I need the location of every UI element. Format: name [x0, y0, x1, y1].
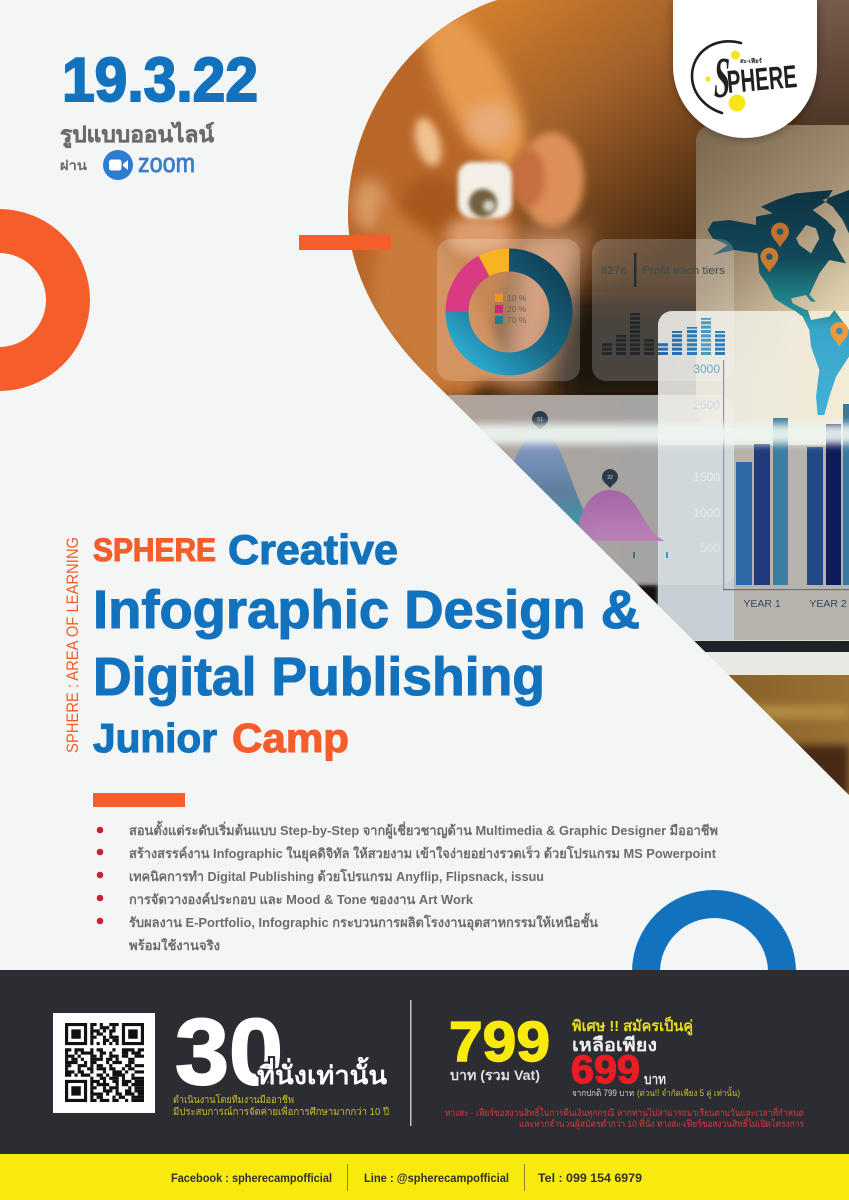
bullet list: [97, 820, 718, 953]
bullet list: รับผลงาน E-Portfolio, Infographic กระบวนการผลิตโรงงานอุตสาหกรรมให้เหนือชั้น: [129, 912, 598, 931]
title block: Digital Publishing: [93, 647, 545, 707]
couple offer: พิเศษ !! สมัครเป็นคู่: [572, 1016, 693, 1036]
online format label: รูปแบบออนไลน์: [60, 121, 214, 149]
seats only label: ที่นั่งเท่านั้น: [257, 1056, 387, 1090]
title block: Infographic Design &: [93, 580, 640, 640]
icon: yellow dots: [705, 50, 745, 111]
icon: world map with location pins: [708, 190, 849, 415]
mini bar chart: [607, 313, 720, 355]
bar chart: YEAR 1: [743, 598, 781, 610]
regular price note: [572, 1086, 740, 1099]
orange accent bar: [299, 235, 391, 250]
couple offer: 699: [571, 1048, 640, 1092]
bar chart: YEAR 2: [809, 598, 847, 610]
screen area below the dashboard: [430, 395, 849, 800]
pill held between the fingers: [458, 162, 512, 218]
icon: sphere arc: [692, 41, 741, 113]
organiser note: [173, 1093, 389, 1118]
chart axis labels: 3000: [693, 362, 720, 376]
regular price note: (ด่วน!! จำกัดเพียง 5 คู่ เท่านั้น): [637, 1086, 740, 1099]
panel: area chart card: [420, 395, 734, 585]
title block: SPHERE: [93, 532, 216, 568]
seat count number: 30: [175, 999, 283, 1104]
card heading: 8276: [601, 265, 627, 277]
panel: donut card: [437, 239, 580, 381]
chart axis labels: 2000: [693, 434, 720, 448]
logo wordmark: S: [714, 45, 730, 110]
glare band across the screen: [470, 424, 849, 444]
QR code: [53, 1013, 155, 1113]
photo: hand touching a dashboard of charts: [340, 0, 849, 800]
chart axis labels: 1000: [693, 506, 720, 520]
couple offer: [571, 1016, 693, 1092]
refund conditions: ทางสะ - เฟียร์ขอสงวนสิทธิ์ในการคืนเงินทุกกรณี หากท่านไม่สามารถมาเรียนตามวันและเวลาที่กำหนด: [445, 1105, 804, 1119]
orange divider bar: [93, 793, 185, 807]
card heading: [601, 253, 726, 287]
organiser note: มีประสบการณ์การจัดค่ายเพื่อการศึกษามากกว่า 10 ปี: [173, 1104, 389, 1118]
logo wordmark: PHERE: [725, 58, 798, 100]
donut legend: 20 %: [507, 304, 527, 314]
organiser note: ดำเนินงานโดยทีมงานมืออาชีพ: [173, 1093, 294, 1106]
contact details: Tel : 099 154 6979: [538, 1171, 642, 1185]
title block: Junior: [93, 715, 217, 761]
vertical separator: [410, 1000, 412, 1126]
chart axis labels: 500: [700, 541, 720, 555]
icon: zoom camera: [103, 150, 133, 180]
panel: dark info band: [0, 970, 849, 1154]
couple offer: บาท: [644, 1071, 666, 1087]
chart axis labels: 2500: [693, 398, 720, 412]
bullet list: เทคนิคการทำ Digital Publishing ด้วยโปรแกรม Anyflip, Flipsnack, issuu: [129, 868, 544, 884]
title block: Creative: [228, 526, 398, 573]
area chart: 22: [607, 475, 613, 481]
zoom wordmark: zoom: [138, 148, 195, 178]
via label: ผ่าน: [60, 158, 87, 173]
donut legend: 10 %: [507, 293, 527, 303]
bullet list: การจัดวางองค์ประกอบ และ Mood & Tone ของงาน Art Work: [129, 892, 474, 907]
logo wordmark: [714, 45, 798, 110]
world map panel: [696, 125, 849, 425]
chart axis labels: 1500: [693, 470, 720, 484]
vertical tagline: SPHERE : AREA OF LEARNING: [64, 537, 82, 753]
logo small thai wordmark: สะ-เฟียร์: [740, 57, 763, 65]
donut chart: [457, 260, 561, 364]
card heading: Profit each tiers: [642, 265, 726, 277]
bullet list: สร้างสรรค์งาน Infographic ในยุคดิจิทัล ให้สวยงาม เข้าใจง่ายอย่างรวดเร็ว ด้วยโปรแกรม MS Powerpoint: [129, 844, 717, 862]
refund conditions: [445, 1105, 804, 1130]
donut legend: 70 %: [507, 315, 527, 325]
bullet list: สอนตั้งแต่ระดับเริ่มต้นแบบ Step-by-Step จากผู้เชี่ยวชาญด้าน Multimedia & Graphic Designer มืออาชีพ: [129, 820, 718, 839]
date: 19.3.22: [62, 46, 258, 115]
white bright panel behind bar chart: [658, 311, 849, 641]
chart axis labels: [693, 362, 720, 555]
logo badge: [673, 0, 817, 138]
panel: yellow contact bar: [0, 1154, 849, 1200]
donut legend: [495, 293, 527, 325]
contact details: [171, 1164, 642, 1191]
bar chart: [723, 360, 849, 610]
title block: [93, 526, 640, 761]
contact details: Facebook : spherecampofficial: [171, 1171, 332, 1185]
area chart: 51: [537, 417, 543, 423]
price unit: บาท (รวม Vat): [450, 1067, 540, 1083]
orange ring: [0, 231, 68, 369]
area chart: [514, 411, 668, 558]
contact details: Line : @spherecampofficial: [364, 1171, 509, 1185]
blue ring: [646, 904, 782, 1040]
refund conditions: และหากจำนวนผู้สมัครต่ำกว่า 10 ที่นั่ง ทางสะ-เฟียร์ขอสงวนสิทธิ์ไม่เปิดโครงการ: [519, 1116, 804, 1130]
title block: Camp: [232, 715, 349, 761]
bullet list: พร้อมใช้งานจริง: [129, 937, 220, 953]
left side of the hand: [340, 30, 520, 400]
couple offer: เหลือเพียง: [572, 1035, 657, 1055]
panel: profit each tiers card: [592, 239, 734, 381]
regular price note: จากปกติ 799 บาท: [572, 1088, 634, 1098]
price 799: 799: [449, 1010, 550, 1074]
